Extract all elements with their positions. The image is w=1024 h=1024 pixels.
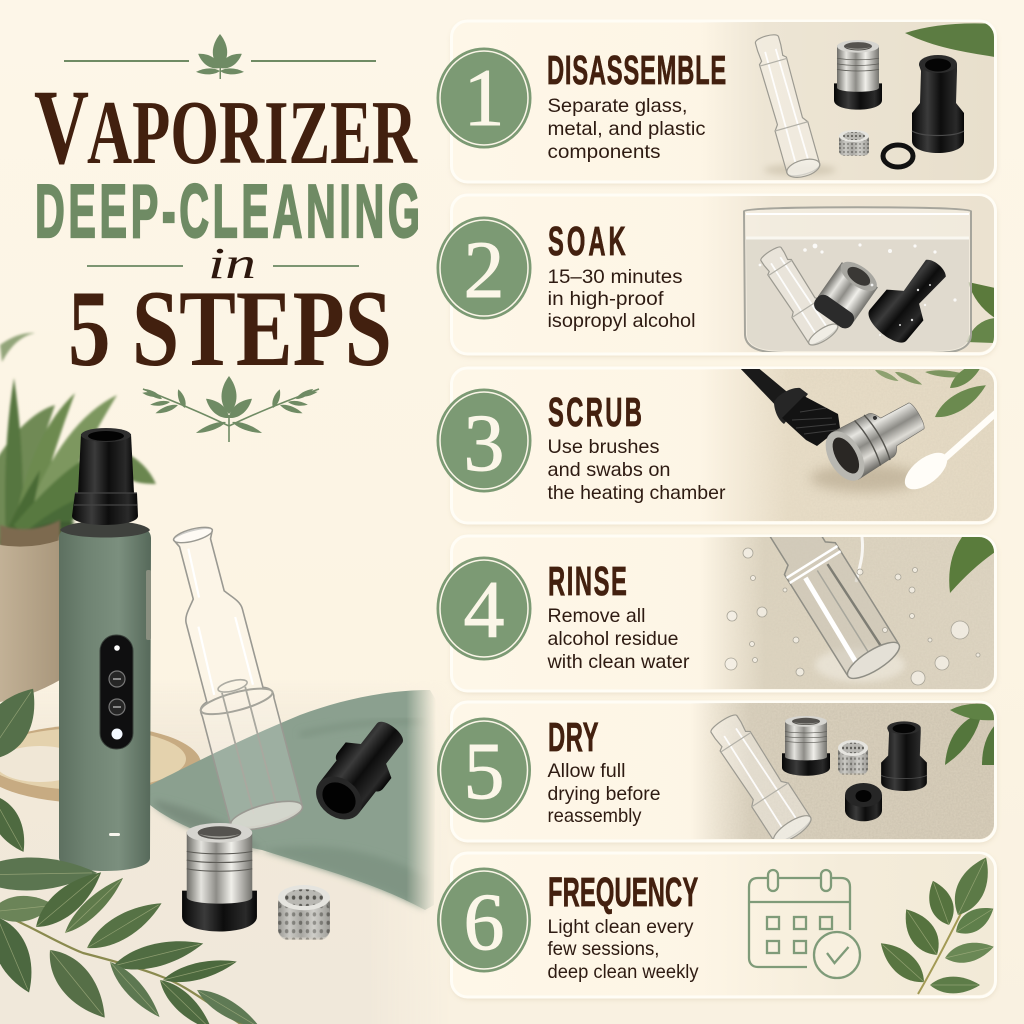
brush [741, 369, 786, 404]
vaporizer device [59, 428, 151, 871]
panel: step 2 soak [437, 195, 996, 356]
description 3: and swabs on [548, 459, 670, 481]
folded towel [150, 690, 434, 912]
ornament: top leaf with rules [64, 34, 376, 79]
description 5: Allow full [548, 760, 626, 782]
title: in with rules: in [208, 239, 256, 288]
mesh filter [278, 885, 330, 940]
card 4 surface [452, 536, 996, 693]
mouthpiece [60, 428, 150, 538]
heading 6: FREQUENCY [548, 871, 698, 916]
badge 1: 1 [464, 52, 504, 143]
description 5 [548, 760, 660, 827]
plate [0, 725, 201, 803]
potted plant [0, 333, 156, 702]
table surface [0, 732, 382, 1024]
hero photo illustration [0, 333, 436, 1024]
description 2: 15–30 minutes [548, 266, 683, 288]
title: Vaporizer: APORIZER [87, 82, 418, 183]
panel: step 5 dry [438, 702, 996, 847]
glass bowl [744, 207, 971, 353]
description 5: drying before [548, 783, 660, 805]
badge 3: 3 [464, 397, 504, 488]
description 4 [546, 605, 690, 673]
description 2: isopropyl alcohol [548, 310, 696, 332]
leaf sprig [873, 852, 999, 994]
description 6 [548, 916, 699, 983]
badge 1 [437, 48, 531, 148]
panel: step 3 scrub [437, 357, 997, 525]
title: 5 Steps: 5 STEPS [68, 268, 392, 389]
description 3: Use brushes [548, 436, 660, 458]
description 6: few sessions, [548, 938, 660, 960]
panel: step 4 rinse [436, 534, 998, 694]
badge 6 [438, 868, 530, 972]
black mouthpiece part [304, 710, 417, 831]
description 4: Remove all [548, 605, 646, 627]
description 1: components [548, 141, 661, 163]
heading 5: DRY [548, 716, 598, 761]
card 1 surface [452, 21, 996, 184]
step 3 photo [741, 369, 994, 498]
panel: step 1 disassemble [437, 21, 996, 184]
description 1: metal, and plastic [548, 118, 706, 140]
description 1 [548, 95, 706, 163]
heading 3: SCRUB [548, 391, 642, 436]
ornament: bottom laurel [142, 376, 319, 442]
badge 5 [438, 718, 530, 822]
title block [34, 34, 420, 442]
description 2: in high-proof [548, 288, 664, 310]
badge 3 [437, 389, 531, 492]
glass tube [155, 520, 306, 836]
small black cap [845, 783, 882, 821]
card 2 surface [452, 195, 996, 356]
card 6 surface [452, 853, 996, 999]
title: Vaporizer: V [34, 69, 89, 187]
device body [59, 522, 151, 871]
title: Vaporizer [34, 69, 418, 187]
badge 2 [437, 217, 531, 319]
foreground branch [0, 677, 265, 1024]
metal piece [826, 402, 924, 480]
heading 4: RINSE [548, 560, 627, 605]
cotton swab [904, 410, 994, 490]
step 1 photo [750, 23, 995, 181]
description 4: with clean water [546, 651, 690, 673]
charge indicator [109, 833, 120, 836]
leaves [875, 369, 986, 418]
badge 6: 6 [464, 876, 504, 967]
metal chamber [182, 823, 257, 931]
card 5 surface [452, 702, 996, 843]
badge 4 [437, 557, 531, 660]
calendar icon [749, 870, 860, 978]
water droplets [725, 548, 980, 685]
panel: step 6 frequency [438, 852, 999, 999]
badge 5: 5 [464, 725, 504, 816]
heading 1: DISASSEMBLE [547, 49, 726, 94]
heading 2: SOAK [548, 220, 626, 265]
title: Deep-Cleaning: DEEP-CLEANING [35, 169, 420, 253]
badge 4: 4 [464, 564, 504, 655]
description 6: deep clean weekly [548, 961, 699, 983]
description 6: Light clean every [548, 916, 694, 938]
description 3: the heating chamber [548, 482, 726, 504]
description 1: Separate glass, [548, 95, 688, 117]
control panel [100, 635, 133, 749]
step 4 photo [724, 537, 994, 686]
step 2 photo [744, 207, 995, 353]
description 4: alcohol residue [548, 628, 678, 650]
step 5 photo [700, 703, 995, 847]
description 3 [548, 436, 726, 504]
description 5: reassembly [548, 805, 642, 827]
description 2 [548, 266, 696, 332]
card 3 surface [452, 368, 996, 525]
badge 2: 2 [464, 224, 504, 315]
